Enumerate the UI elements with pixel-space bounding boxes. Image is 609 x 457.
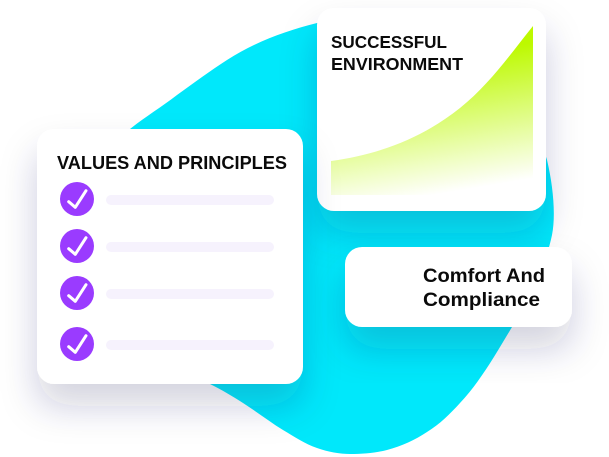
checklist item 3	[60, 276, 274, 310]
heading: successful environment: SUCCESSFUL	[331, 32, 447, 52]
background blob	[117, 21, 554, 454]
label: comfort and compliance	[423, 266, 545, 311]
checklist item 1	[60, 182, 274, 216]
label: comfort and compliance: Comfort And	[423, 266, 545, 287]
heading: successful environment	[331, 32, 463, 74]
panel: successful environment	[317, 8, 546, 211]
checklist item 4	[60, 327, 274, 361]
heading: successful environment: ENVIRONMENT	[331, 54, 463, 74]
heading: values and principles: VALUES AND PRINCIPLES	[57, 153, 287, 173]
label: comfort and compliance: Compliance	[423, 290, 540, 311]
checklist item 2	[60, 229, 274, 263]
area chart	[331, 26, 533, 195]
panel: comfort and compliance	[345, 247, 572, 327]
panel: values and principles	[37, 129, 303, 384]
